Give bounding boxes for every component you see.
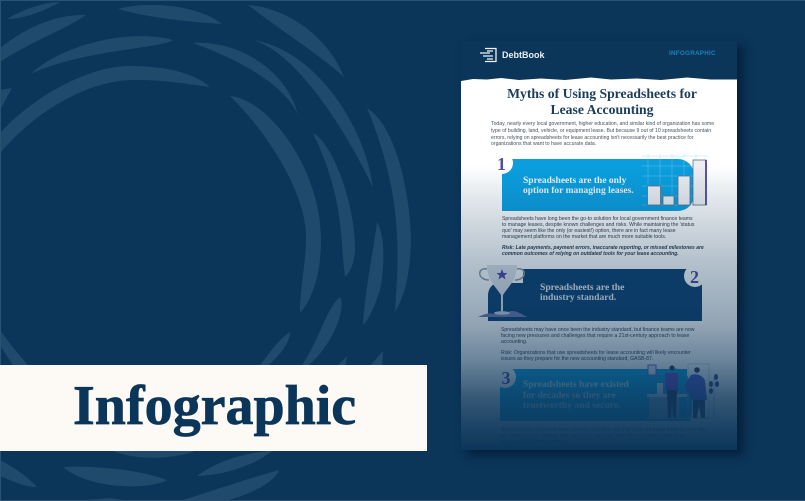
myth 2 number: 2 bbox=[690, 267, 699, 287]
myth 1 paragraph: quo' may seem like the only (or easiest!) option, there are in fact many lease bbox=[502, 228, 676, 234]
document header bar bbox=[480, 48, 716, 62]
myth 1 heading bbox=[523, 176, 634, 196]
banner: Infographic bbox=[0, 365, 427, 451]
myth 2 risk: Risk: Organizations that use spreadsheets for lease accounting will likely encounter bbox=[501, 350, 691, 356]
myth 1 heading: Spreadsheets are the only bbox=[523, 176, 626, 186]
myth 3 number: 3 bbox=[502, 368, 510, 388]
myth 1 number: 1 bbox=[497, 154, 506, 174]
title: Myths of Using Spreadsheets for bbox=[507, 86, 697, 101]
myth 2 heading: Spreadsheets are the bbox=[540, 282, 624, 293]
document white page bbox=[461, 78, 737, 440]
myth 1 number bbox=[491, 152, 513, 174]
intro paragraph: organizations that want to have accurate data. bbox=[491, 141, 596, 147]
myth 3 heading: for decades so they are bbox=[523, 390, 616, 400]
intro paragraph bbox=[491, 121, 714, 147]
banner heading: Infographic bbox=[73, 375, 356, 437]
myth 2 number bbox=[684, 265, 706, 287]
myth 1 risk bbox=[502, 245, 704, 257]
myth 1 paragraph: to manage leases, despite known challenges and risks. While maintaining the 'status bbox=[502, 222, 694, 228]
myth 3 heading bbox=[523, 379, 629, 411]
myth 3 heading: trustworthy and secure. bbox=[523, 400, 621, 411]
myth 1 paragraph: management platforms on the market that are much more suitable tools. bbox=[502, 234, 666, 240]
myth 3 paragraph: are easily edited, shared, and corrupted, and they lack the audit trails many need bbox=[501, 433, 685, 439]
myth 3 paragraph: for sound data management. bbox=[501, 439, 567, 445]
myth 2 risk: issues as they prepare for the new accounting standard, GASB-87. bbox=[501, 356, 653, 362]
icon: trophy bbox=[478, 265, 527, 317]
myth 2 paragraph: facing new pressures and challenges that require a 21st-century approach to lease bbox=[501, 333, 689, 339]
title bbox=[507, 86, 697, 117]
myth 2 paragraph: accounting. bbox=[501, 339, 527, 345]
myth 2 panel bbox=[488, 269, 702, 321]
myth 3 heading: Spreadsheets have existed bbox=[523, 379, 629, 390]
document preview bbox=[461, 41, 737, 450]
myth 1 paragraph bbox=[502, 216, 694, 240]
header label: INFOGRAPHIC bbox=[669, 50, 716, 57]
myth 1 panel bbox=[502, 159, 694, 211]
myth 3 number bbox=[494, 366, 516, 388]
myth 3 paragraph bbox=[501, 427, 708, 445]
intro paragraph: Today, nearly every local government, higher education, and similar kind of organization has some bbox=[491, 121, 714, 127]
myth 2 heading bbox=[540, 282, 624, 303]
myth 2 heading: industry standard. bbox=[540, 292, 616, 303]
bar chart icon bbox=[642, 154, 708, 206]
myth 1 risk: common outcomes of relying on outdated tools for your lease accounting. bbox=[502, 251, 679, 257]
myth 2 paragraph: Spreadsheets may have once been the industry standard, but finance teams are now bbox=[501, 327, 694, 333]
myth 3 panel bbox=[500, 369, 687, 421]
fade overlay bbox=[461, 165, 737, 450]
icon: DebtBook logo bbox=[480, 48, 497, 62]
myth 2 risk bbox=[501, 350, 691, 362]
intro paragraph: type of building, land, vehicle, or equipment lease. But because 9 out of 10 spreadsheets contain bbox=[491, 128, 711, 134]
myth 1 heading: option for managing leases. bbox=[523, 186, 634, 196]
logo wordmark: DebtBook bbox=[502, 50, 544, 60]
myth 1 risk: Risk: Late payments, payment errors, inaccurate reporting, or missed milestones are bbox=[502, 245, 704, 251]
intro paragraph: errors, relying on spreadsheets for lease accounting isn't necessarily the best practice for bbox=[491, 135, 693, 141]
myth 1 paragraph: Spreadsheets have long been the go-to solution for local government finance teams bbox=[502, 216, 693, 222]
illustration: two people shaking hands bbox=[645, 364, 719, 421]
title: Lease Accounting bbox=[550, 102, 654, 117]
myth 3 paragraph: Spreadsheets may have been used for decades, but that does not make them secure; they bbox=[501, 427, 708, 433]
myth 2 paragraph bbox=[501, 327, 694, 345]
